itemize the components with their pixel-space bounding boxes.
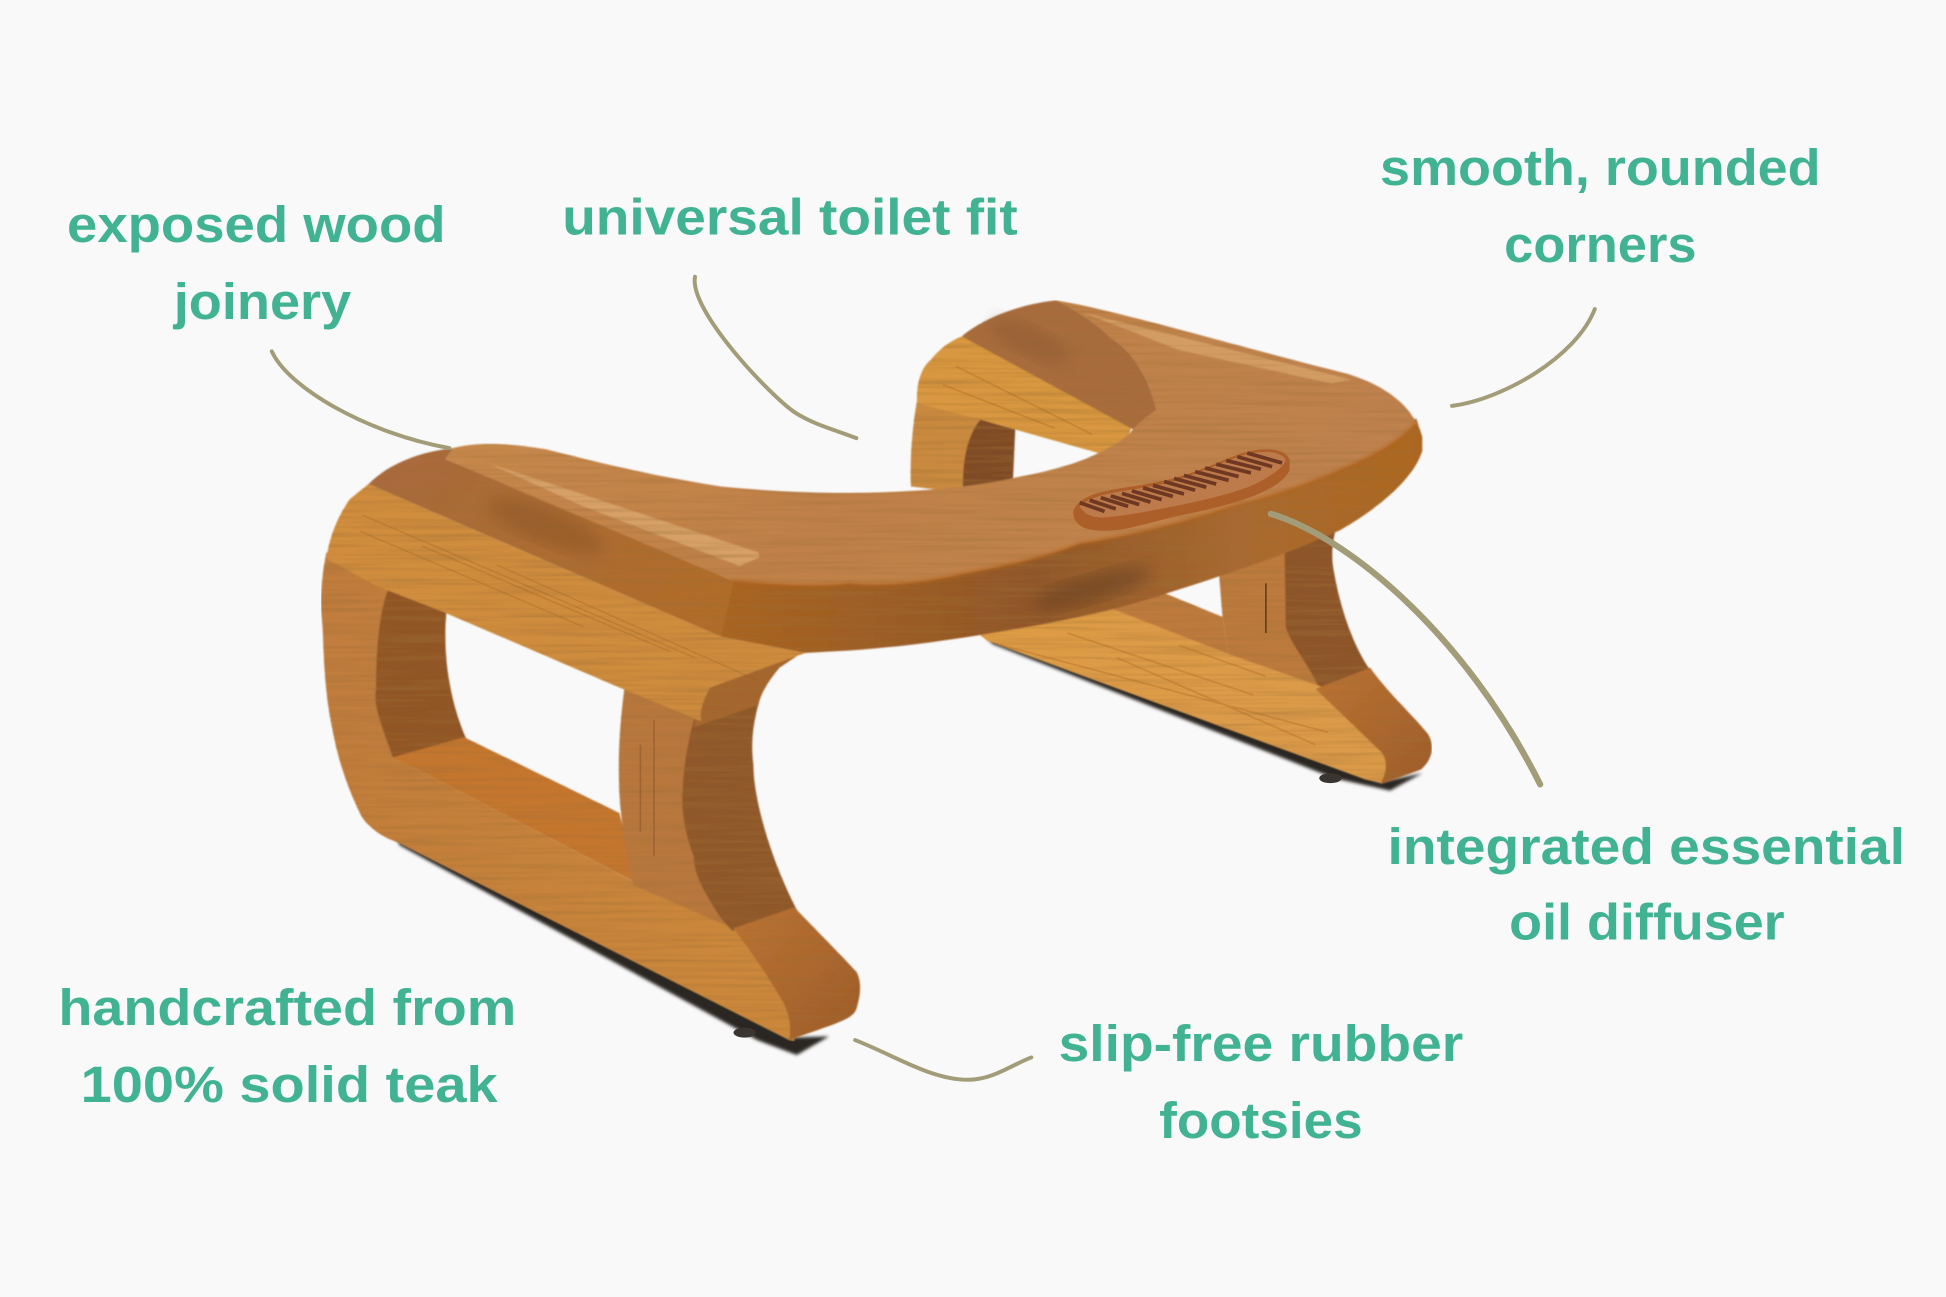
near right foot [1316, 668, 1432, 784]
bottom rail face [333, 730, 794, 1041]
label: exposed wood joinery [67, 196, 446, 330]
rubber feet [733, 773, 1342, 1038]
far leg: post [911, 400, 993, 494]
bottom rail inner top [393, 737, 638, 884]
left beam [326, 484, 805, 721]
left post outer [321, 552, 416, 841]
callout line: smooth rounded corners [1452, 309, 1595, 406]
label: slip-free rubber footsies [1059, 1015, 1463, 1149]
near right post: inner curve [1285, 521, 1370, 691]
stool photo illustration [321, 300, 1432, 1055]
label: handcrafted from 100% solid teak [58, 979, 516, 1113]
callout line: rubber footsies [855, 1040, 1031, 1080]
label: exposed wood joinery: exposed wood [67, 196, 446, 253]
diffuser slats [1080, 453, 1282, 511]
front post light [619, 680, 738, 931]
far beam [917, 336, 1133, 453]
callout line: universal toilet fit [695, 277, 856, 438]
callout line: essential oil diffuser [1271, 514, 1540, 784]
label: exposed wood joinery: joinery [173, 273, 352, 330]
seat flat top [446, 300, 1420, 586]
seat front edge highlight [732, 423, 1416, 586]
far leg: inner shadow [963, 420, 1015, 490]
label: integrated essential oil diffuser: integrated essential [1388, 818, 1905, 875]
label: integrated essential oil diffuser [1388, 818, 1905, 951]
near right rail inner top [1092, 590, 1229, 654]
label: universal toilet fit: universal toilet fit [562, 189, 1018, 246]
left post inner shadow [375, 588, 467, 760]
essential oil diffuser [1073, 449, 1289, 531]
dark wood marks [360, 309, 1328, 856]
foot [733, 907, 860, 1040]
front post inner curve [682, 700, 797, 931]
diffuser recess [1080, 452, 1286, 518]
wooden parts with grain [321, 300, 1432, 1041]
label: smooth, rounded corners [1380, 139, 1821, 273]
near right post [1219, 540, 1325, 693]
near right rail [974, 608, 1392, 783]
seat back rounded end [962, 300, 1157, 429]
label: slip-free rubber footsies: footsies [1159, 1092, 1363, 1149]
callout line: exposed wood joinery [272, 351, 449, 448]
seat side band [721, 418, 1422, 653]
joinery inlay back [1083, 313, 1352, 384]
label: integrated essential oil diffuser: oil diffuser [1509, 894, 1785, 951]
under seat curve [694, 648, 809, 727]
label: slip-free rubber footsies: slip-free rubber [1059, 1015, 1463, 1072]
diffuser body [1073, 449, 1289, 531]
label: smooth, rounded corners: corners [1504, 216, 1697, 273]
joinery inlay left [488, 463, 760, 566]
label: handcrafted from 100% solid teak: 100% solid teak [81, 1056, 498, 1113]
seat left rounded end [369, 448, 735, 637]
label: smooth, rounded corners: smooth, rounded [1380, 139, 1821, 196]
label: handcrafted from 100% solid teak: handcrafted from [58, 979, 516, 1036]
floor shadows [397, 638, 1422, 1055]
